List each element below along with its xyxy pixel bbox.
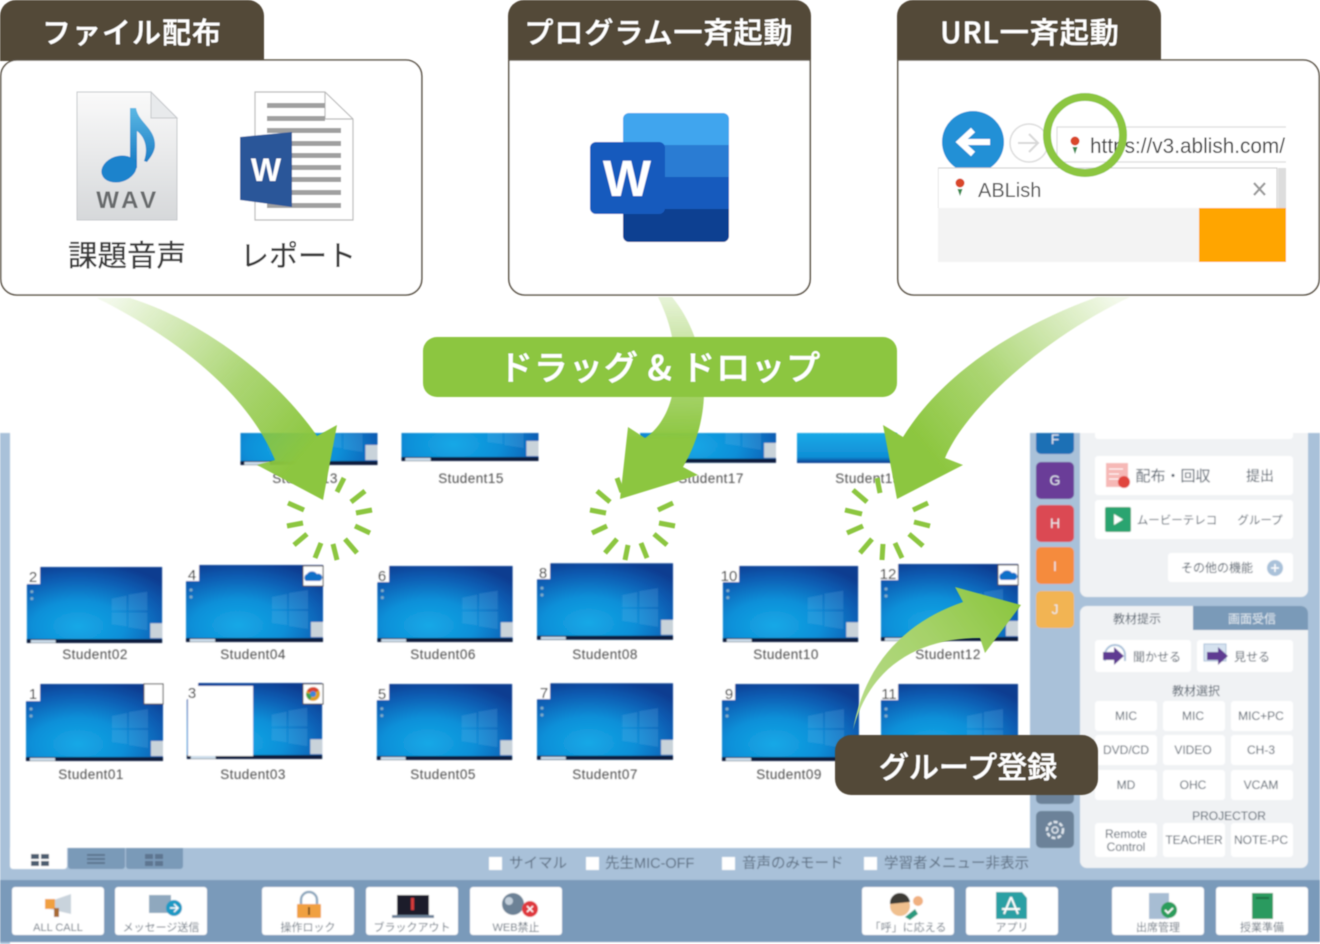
student thumbnail 09	[722, 684, 859, 782]
sidebar group letter buttons: F	[1051, 431, 1059, 447]
panel: teaching material: 聞かせる	[1133, 650, 1181, 664]
panel: file distribution	[0, 0, 422, 295]
student thumbnail 07: 7	[540, 685, 548, 702]
panel: teaching material: MIC	[1182, 709, 1204, 723]
button: attendance: 出席管理	[1136, 920, 1180, 934]
icon: settings gear	[1036, 811, 1074, 848]
panel: teaching material: CH-3	[1247, 743, 1275, 757]
view tabs	[10, 848, 183, 869]
student thumbnail 11	[881, 684, 1018, 761]
student thumbnail 07: Student07	[572, 767, 638, 782]
option checkboxes: 音声のみモード	[742, 854, 844, 872]
button: ALL CALL: ALL CALL	[33, 922, 83, 934]
arrow: group registration	[853, 587, 1021, 730]
button: blackout: ブラックアウト	[374, 920, 450, 934]
panel: teaching material: 教材選択	[1172, 683, 1220, 698]
student thumbnail 12: 12	[880, 566, 896, 583]
panel: teaching material: Remote	[1105, 827, 1147, 841]
option checkboxes: サイマル	[509, 856, 567, 872]
student labels, top row: Student13	[272, 471, 338, 486]
button: blackout	[366, 887, 458, 935]
button: respond to call	[862, 887, 954, 935]
student thumbnail 08: 8	[539, 565, 547, 582]
student thumbnail 09: 9	[725, 686, 733, 703]
student thumbnail 05: Student05	[410, 767, 476, 782]
student thumbnail 05: 5	[378, 686, 386, 703]
button: respond to call: 「呼」に応える	[870, 921, 946, 934]
student labels, top row: Student15	[438, 471, 504, 486]
icon: WAV file	[77, 92, 177, 220]
option checkboxes	[489, 854, 1029, 872]
student thumbnail 12: Student12	[915, 647, 981, 662]
student thumbnail 10: Student10	[753, 647, 819, 662]
arrow: launch programs to students	[620, 297, 704, 499]
student thumbnail 01: Student01	[58, 767, 124, 782]
heading tab: launch programs	[508, 0, 811, 61]
panel: teaching material: 教材提示	[1113, 611, 1161, 626]
browser screenshot: https://v3.ablish.com/	[1090, 135, 1285, 158]
panel: launch programs	[508, 0, 811, 295]
panel: distribution tools: 配布・回収	[1135, 468, 1211, 485]
student thumbnails, top row	[239, 432, 898, 466]
sidebar group letter buttons: J	[1052, 601, 1058, 617]
student labels, top row: Student19	[835, 471, 901, 486]
panel: teaching material: VIDEO	[1174, 743, 1212, 757]
button: message send: メッセージ送信	[123, 920, 199, 934]
browser screenshot	[938, 97, 1286, 262]
student thumbnail 02: Student02	[62, 647, 128, 662]
student thumbnail 01	[26, 684, 163, 782]
student thumbnail 10: 10	[721, 568, 737, 585]
student labels, top row: Student17	[678, 471, 744, 486]
panel: teaching material: 画面受信	[1228, 612, 1276, 626]
burst: drop point 3	[845, 478, 930, 560]
panel: teaching material: MIC	[1115, 709, 1137, 723]
arrow: file distribution to students	[97, 298, 337, 500]
student thumbnail 06: Student06	[410, 647, 476, 662]
panel: teaching material: NOTE-PC	[1234, 833, 1288, 847]
bottom toolbar	[0, 880, 1320, 942]
heading tab: launch programs: プログラム一斉起動	[524, 10, 794, 52]
panel: launch URL	[897, 0, 1319, 295]
student thumbnail 01: 1	[29, 686, 37, 703]
student thumbnail 03: 3	[188, 685, 196, 702]
student thumbnail 02	[26, 567, 162, 662]
button: lesson prep	[1216, 887, 1308, 935]
button: operation lock	[262, 887, 354, 935]
panel: teaching material: VCAM	[1244, 778, 1278, 792]
student thumbnail 05	[376, 684, 512, 782]
browser screenshot: ABLish	[978, 180, 1041, 202]
button: apps	[966, 887, 1058, 935]
student thumbnail 12	[880, 564, 1018, 662]
badge: drag and drop: ドラッグ & ドロップ	[499, 341, 821, 390]
student thumbnail 08: Student08	[572, 647, 638, 662]
burst: drop point 2	[590, 478, 675, 560]
label: assignment audio: 課題音声	[68, 233, 186, 275]
button: attendance	[1112, 887, 1204, 935]
button: web block: WEB禁止	[492, 921, 540, 934]
sidebar group letter buttons: H	[1050, 515, 1060, 531]
student thumbnail 03: Student03	[220, 767, 286, 782]
arrow: launch URL to students	[883, 297, 1130, 499]
panel: distribution tools: 提出	[1246, 468, 1274, 484]
panel: teaching material: MIC+PC	[1238, 709, 1284, 723]
panel: teaching material: DVD/CD	[1103, 743, 1149, 757]
panel: teaching material: PROJECTOR	[1192, 809, 1266, 823]
panel: distribution tools	[1080, 433, 1308, 597]
button: ALL CALL	[12, 887, 104, 935]
student thumbnail 11: 11	[881, 686, 897, 703]
heading tab: file distribution: ファイル配布	[42, 10, 222, 52]
student thumbnail 06: 6	[378, 568, 386, 585]
student thumbnail 04: Student04	[220, 647, 286, 662]
button: message send	[115, 887, 207, 935]
student thumbnail 04: 4	[188, 567, 196, 584]
panel: teaching material: OHC	[1180, 778, 1207, 792]
student thumbnail 03	[186, 683, 323, 782]
icon: Word document	[240, 92, 353, 220]
sidebar group letter buttons	[1036, 431, 1074, 804]
screen: classroom control software	[0, 384, 1320, 944]
badge: group registration	[835, 735, 1098, 795]
button: operation lock: 操作ロック	[280, 920, 336, 934]
icon: Microsoft Word	[590, 113, 729, 242]
panel: distribution tools: その他の機能	[1181, 561, 1253, 575]
panel: distribution tools: グループ	[1237, 513, 1283, 527]
icon: Word document: W	[251, 152, 282, 188]
heading tab: launch URL	[897, 0, 1161, 61]
student labels, top row	[272, 471, 901, 486]
student thumbnail 07	[537, 683, 673, 782]
panel: teaching material	[1080, 606, 1308, 868]
student thumbnail 09: Student09	[756, 767, 822, 782]
panel: distribution tools: ムービーテレコ	[1137, 514, 1217, 527]
heading tab: launch URL: URL一斉起動	[940, 10, 1120, 52]
button: apps: アプリ	[996, 921, 1028, 934]
heading tab: file distribution	[0, 0, 264, 61]
sidebar group letter buttons: G	[1050, 472, 1060, 488]
button: lesson prep: 授業準備	[1240, 920, 1284, 934]
panel: teaching material: Control	[1107, 840, 1145, 854]
panel: teaching material: TEACHER	[1165, 833, 1223, 847]
student thumbnail 06	[376, 566, 513, 662]
badge: drag and drop	[423, 337, 897, 397]
button: web block	[470, 887, 562, 935]
student thumbnail 10	[721, 566, 858, 662]
badge: group registration: グループ登録	[879, 743, 1057, 787]
burst: drop point 1	[287, 478, 372, 560]
icon: WAV file: WAV	[96, 187, 160, 214]
panel: teaching material: 見せる	[1234, 650, 1270, 664]
icon: Microsoft Word: W	[603, 150, 652, 207]
option checkboxes: 先生MIC-OFF	[605, 855, 695, 872]
student thumbnail 08	[537, 563, 673, 662]
option checkboxes: 学習者メニュー非表示	[884, 855, 1029, 872]
panel: teaching material: MD	[1117, 778, 1136, 792]
student thumbnail 02: 2	[29, 569, 37, 586]
label: report: レポート	[240, 233, 356, 275]
student thumbnail 04	[186, 565, 323, 662]
sidebar group letter buttons: I	[1053, 558, 1057, 574]
